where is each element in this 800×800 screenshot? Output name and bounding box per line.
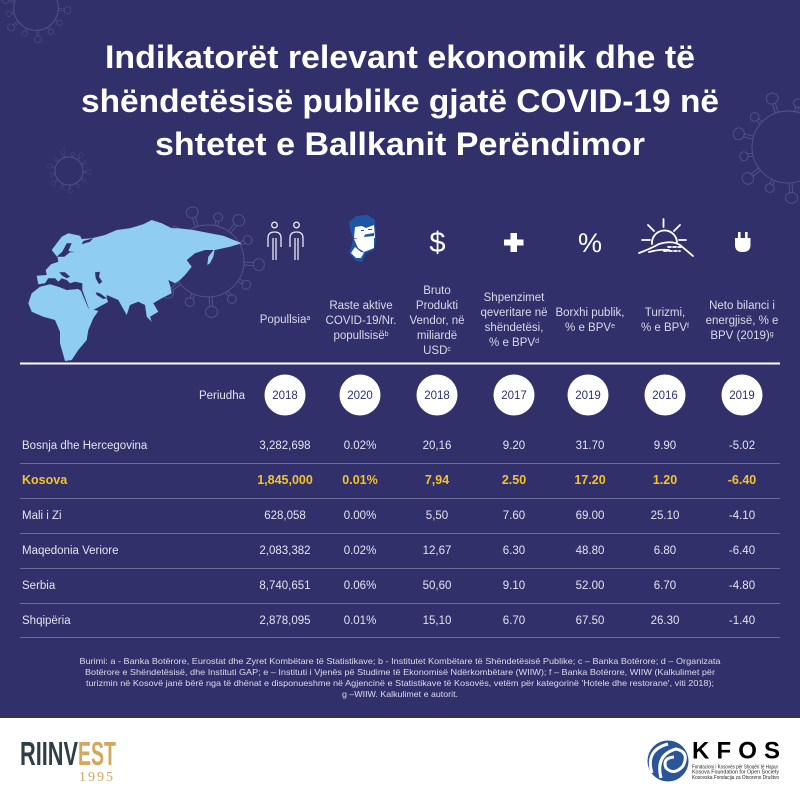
- period row: 2018: [424, 390, 450, 402]
- row: Albania: 0.01%: [344, 615, 376, 627]
- Riinvest logo: EST: [78, 735, 116, 772]
- header: active cases: b: [385, 331, 389, 338]
- decorative virus lower left: [47, 149, 91, 193]
- row: Montenegro: 7.60: [503, 510, 525, 522]
- header: energy: [706, 300, 778, 342]
- row: Montenegro: 628,058: [264, 510, 306, 522]
- title: shtetet e Ballkanit Perëndimor: [155, 126, 645, 162]
- decorative virus behind map: [152, 205, 265, 318]
- source notes: g –WIIW. Kalkulimet e autorit.: [342, 690, 458, 699]
- Riinvest logo: RIINV: [20, 735, 78, 772]
- row: Montenegro: 25.10: [651, 510, 679, 522]
- row: Montenegro: -4.10: [729, 510, 755, 522]
- row: Bosnia: 20,16: [423, 440, 451, 452]
- period row: Periudha: [199, 390, 246, 402]
- header: health spending: Shpenzimet: [484, 292, 545, 304]
- row: Kosova highlighted: [22, 473, 756, 487]
- row: North Macedonia: 0.02%: [344, 545, 376, 557]
- icon: sun over hills: [639, 219, 693, 256]
- header: health spending: shëndetësi,: [485, 322, 543, 334]
- header: public debt: [555, 307, 625, 334]
- row: North Macedonia: [22, 545, 755, 557]
- row: Serbia: 9.10: [503, 580, 525, 592]
- header: active cases: Raste aktive: [329, 300, 393, 312]
- row: Albania: [22, 615, 755, 627]
- header: energy: BPV (2019): [710, 330, 770, 342]
- row: Albania: 6.70: [503, 615, 525, 627]
- row: Albania: Shqipëria: [22, 615, 71, 627]
- row: Serbia: 52.00: [576, 580, 604, 592]
- header: GDP: Bruto: [423, 285, 451, 297]
- header: GDP: c: [447, 346, 451, 353]
- row: Kosova highlighted: 1,845,000: [257, 473, 313, 487]
- Riinvest logo: 1995: [79, 770, 113, 785]
- row: North Macedonia: 2,083,382: [259, 545, 311, 557]
- icon: plus: [504, 233, 524, 252]
- row: Kosova highlighted: -6.40: [728, 473, 756, 487]
- period row: 2016: [652, 390, 678, 402]
- icon: masked person: [349, 215, 376, 262]
- title: [81, 39, 719, 162]
- header rule: [20, 362, 780, 364]
- row: Kosova highlighted: 1.20: [653, 473, 677, 487]
- source notes: Burimi: a - Banka Botërore, Eurostat dhe Zyret Kombëtare të Statistikave; b - Institutet Kombëtare të Shëndetësisë Publike; c – Banka Botërore; d – Organizata: [80, 657, 721, 666]
- header: active cases: [326, 300, 396, 342]
- row: Kosova highlighted: 0.01%: [342, 473, 378, 487]
- row: Serbia: 50,60: [423, 580, 451, 592]
- header: public debt: Borxhi publik,: [555, 307, 625, 319]
- header: tourism: Turizmi,: [645, 307, 685, 319]
- period row: 2018: [272, 390, 298, 402]
- Riinvest logo: [20, 735, 116, 785]
- decorative virus right: [732, 91, 800, 204]
- header: energy: g: [770, 331, 774, 338]
- row: Serbia: [22, 580, 755, 592]
- title: Indikatorët relevant ekonomik dhe të: [105, 39, 695, 75]
- row: Albania: 26.30: [651, 615, 679, 627]
- header: health spending: % e BPV: [489, 337, 535, 349]
- row: North Macedonia: 48.80: [576, 545, 604, 557]
- header: GDP: [410, 285, 464, 357]
- title: shëndetësisë publike gjatë COVID-19 në: [81, 83, 719, 119]
- header: tourism: f: [687, 323, 689, 330]
- row: Montenegro: 5,50: [426, 510, 448, 522]
- header: health spending: d: [535, 338, 539, 345]
- header: population: a: [306, 315, 310, 322]
- row: Montenegro: Mali i Zi: [22, 510, 62, 522]
- icon: percent: %: [578, 228, 602, 258]
- row: Bosnia: 9.20: [503, 440, 525, 452]
- header: health spending: [480, 292, 548, 349]
- header: energy: energjisë, % e: [706, 315, 778, 327]
- header: public debt: % e BPV: [565, 322, 611, 334]
- row: Bosnia: 0.02%: [344, 440, 376, 452]
- row: Kosova highlighted: 17.20: [574, 473, 606, 487]
- row: Albania: 2,878,095: [259, 615, 311, 627]
- icon: dollar: $: [429, 227, 446, 259]
- row: Bosnia: -5.02: [729, 440, 755, 452]
- header: health spending: qeveritare në: [480, 307, 548, 319]
- icon: two people: [268, 222, 303, 260]
- KFOS logo: KFOS: [692, 738, 780, 764]
- row: North Macedonia: 6.30: [503, 545, 525, 557]
- source notes: Botërore e Shëndetësisë, dhe Instituti GAP; e – Instituti i Vjenës pë Studime të Ekonomisë Ndërkombëtare (WIIW); f – Banka Botërore, WIIW (Kalkulimet për: [85, 668, 715, 677]
- header: energy: Neto bilanci i: [709, 300, 775, 312]
- row: Serbia: 0.06%: [344, 580, 376, 592]
- row: Bosnia: 3,282,698: [259, 440, 311, 452]
- row: Bosnia: 9.90: [654, 440, 676, 452]
- row: Montenegro: 69.00: [576, 510, 604, 522]
- header: GDP: miliardë: [417, 330, 457, 342]
- footer band: [0, 718, 800, 800]
- period row: 2020: [347, 390, 373, 402]
- row: Montenegro: [22, 510, 755, 522]
- period row: 2017: [501, 390, 527, 402]
- header: GDP: USD: [423, 345, 447, 357]
- map of Europe, Asia and Africa: [28, 220, 242, 361]
- row: Kosova highlighted: 7,94: [425, 473, 449, 487]
- row: Albania: 67.50: [576, 615, 604, 627]
- header: public debt: e: [611, 323, 615, 330]
- header: active cases: COVID-19/Nr.: [326, 315, 396, 327]
- icon: plug: [735, 232, 750, 252]
- row: Serbia: Serbia: [22, 580, 56, 592]
- KFOS logo: [648, 738, 780, 782]
- row: Albania: 15,10: [423, 615, 451, 627]
- row: North Macedonia: -6.40: [729, 545, 755, 557]
- header: GDP: Vendor, në: [410, 315, 464, 327]
- row: North Macedonia: Maqedonia Veriore: [22, 545, 119, 557]
- header: population: Popullsia: [260, 314, 306, 326]
- header: GDP: Produkti: [416, 300, 458, 312]
- KFOS logo: Kosovska Fondacija za Otvoreno Društvo: [692, 775, 779, 781]
- row: Kosova highlighted: Kosova: [22, 473, 68, 487]
- row: Bosnia: [22, 440, 755, 452]
- period row: 2019: [729, 390, 755, 402]
- row: Serbia: 6.70: [654, 580, 676, 592]
- column headers: [260, 285, 778, 357]
- period row: [199, 374, 762, 416]
- row: North Macedonia: 6.80: [654, 545, 676, 557]
- source notes: [80, 657, 721, 699]
- KFOS logo: Fondacioni i Kosovës për Shoqëri të Hapur: [692, 764, 778, 770]
- row: Montenegro: 0.00%: [344, 510, 376, 522]
- row: Serbia: 8,740,651: [259, 580, 311, 592]
- row: North Macedonia: 12,67: [423, 545, 451, 557]
- decorative virus top left: [1, 0, 71, 43]
- source notes: turizmin në Kosovë janë bërë nga të dhënat e disponueshme në Agjencinë e Statistikave të Kosovës, vetëm për kategorinë 'Hotele dhe restorane', viti 2018);: [86, 679, 714, 688]
- row: Serbia: -4.80: [729, 580, 755, 592]
- header: tourism: % e BPV: [641, 322, 687, 334]
- row: Kosova highlighted: 2.50: [502, 473, 526, 487]
- KFOS logo: Kosova Foundation for Open Society: [692, 770, 780, 776]
- period row: 2019: [575, 390, 601, 402]
- row: Bosnia: Bosnja dhe Hercegovina: [22, 440, 148, 452]
- header: active cases: popullsisë: [333, 330, 385, 342]
- row: Albania: -1.40: [729, 615, 755, 627]
- header: tourism: [641, 307, 689, 334]
- row: Bosnia: 31.70: [576, 440, 604, 452]
